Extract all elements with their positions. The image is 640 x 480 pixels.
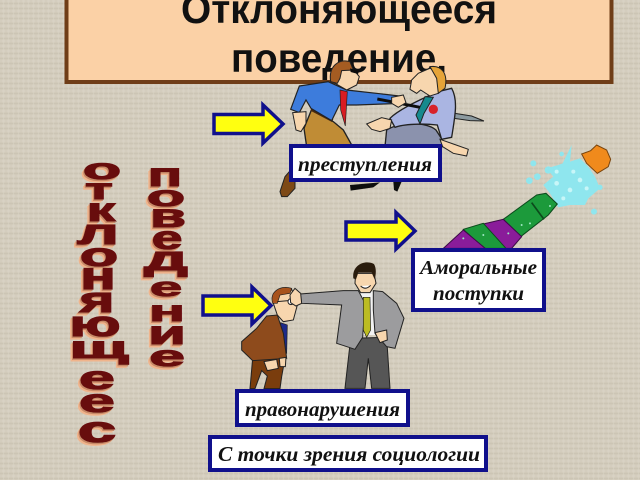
vertical word art: поведение: е [150,272,182,302]
vertical word art: отклоняющеес: о [80,235,118,273]
arrow: to immoral acts [346,212,415,249]
vertical word art: отклоняющеес: т [85,172,113,206]
bottle green band [463,223,506,248]
title panel [66,0,612,82]
short man: trousers [250,358,285,389]
tall man: shirt [358,292,375,335]
shoes [350,182,402,192]
vertical word art: поведение: п [148,156,182,193]
vertical word art: отклоняющеес: щ [69,330,129,365]
vertical word art: отклоняющеес [69,152,129,450]
vertical word art: отклоняющеес: л [77,212,119,252]
stabbed man: wound [429,105,438,114]
stabbed man: far arm and pen tip [454,113,484,121]
arrow: to offences [203,287,271,324]
tall man: pointing hand [290,288,302,306]
vertical word art: поведение: о [147,179,185,213]
tall man: jacket [300,291,404,349]
vertical word art: поведение: и [148,315,186,351]
title: second line: поведение. [231,35,447,81]
cork [582,145,611,173]
bubbles highlights [554,170,589,200]
short man: hands [264,357,286,371]
tall man: trousers [345,337,390,388]
short man: hair [272,287,292,303]
vertical word art: поведение: н [149,294,185,328]
stabbed man: head [410,68,445,96]
label: offences: правонарушения [245,399,400,421]
short man: glasses [277,299,288,303]
vertical word art: отклоняющеес: е [79,382,115,419]
label: crimes: преступления [298,154,432,176]
label: crimes [291,146,440,180]
attacker: trousers [304,109,353,147]
label: from the sociology viewpoint: С точки зрения социологии [218,442,480,466]
spray [526,145,603,215]
attacker: face [333,63,359,90]
attacker: red tie [340,90,347,126]
illustration: tall man pressing on short man [242,262,404,389]
label: immoral acts [413,250,544,310]
attacker: hair [330,61,353,83]
vertical word art: отклоняющеес: е [79,359,115,396]
vertical word art: отклоняющеес: ю [69,304,121,344]
attacker: pen handle [377,99,420,107]
vertical word art: поведение [144,156,188,373]
tall man: yellow tie [363,297,371,337]
label: offences [237,391,408,425]
label: immoral acts: поступки [433,283,524,305]
vertical word art: поведение: д [144,239,188,278]
vertical word art: отклоняющеес: о [83,152,121,186]
stabbed man: hair [430,66,446,93]
attacker: belt [311,109,333,121]
attacker: shirt [291,82,402,121]
label: from the sociology viewpoint [210,437,486,470]
vertical word art: отклоняющеес: с [78,408,116,450]
bottle neck [503,193,557,237]
attacker: hands [392,95,406,107]
stabbed man: trousers [385,124,447,147]
short man: head [273,289,297,322]
stabbed man: shirt [390,88,455,139]
short man: jacket [242,315,287,361]
illustration: champagne bottle [443,145,611,248]
vertical word art: поведение: в [150,198,186,235]
vertical word art: поведение: е [149,339,185,373]
bottle purple band [483,219,522,248]
bottle purple base [443,230,485,248]
tall man: smile [361,285,371,288]
vertical word art: отклоняющеес: я [78,280,115,320]
attacker: eye [350,68,359,74]
vertical word art: отклоняющеес: н [80,254,116,298]
tall man: head [355,273,376,293]
stabbed man: teal tie [416,97,433,124]
bottle dots [462,205,551,239]
attacker: back shoe [280,172,295,197]
illustration: two men fighting [280,61,484,197]
vertical word art: отклоняющеес: к [87,191,116,228]
arrow: to crimes [214,105,283,143]
stabbed man: hands [367,118,392,132]
tall man: hair [353,262,376,279]
label: immoral acts: Аморальные [418,257,537,279]
short man: navy tie [281,323,287,353]
vertical word art: поведение: е [152,219,182,256]
tall man: hip hand [375,330,387,343]
